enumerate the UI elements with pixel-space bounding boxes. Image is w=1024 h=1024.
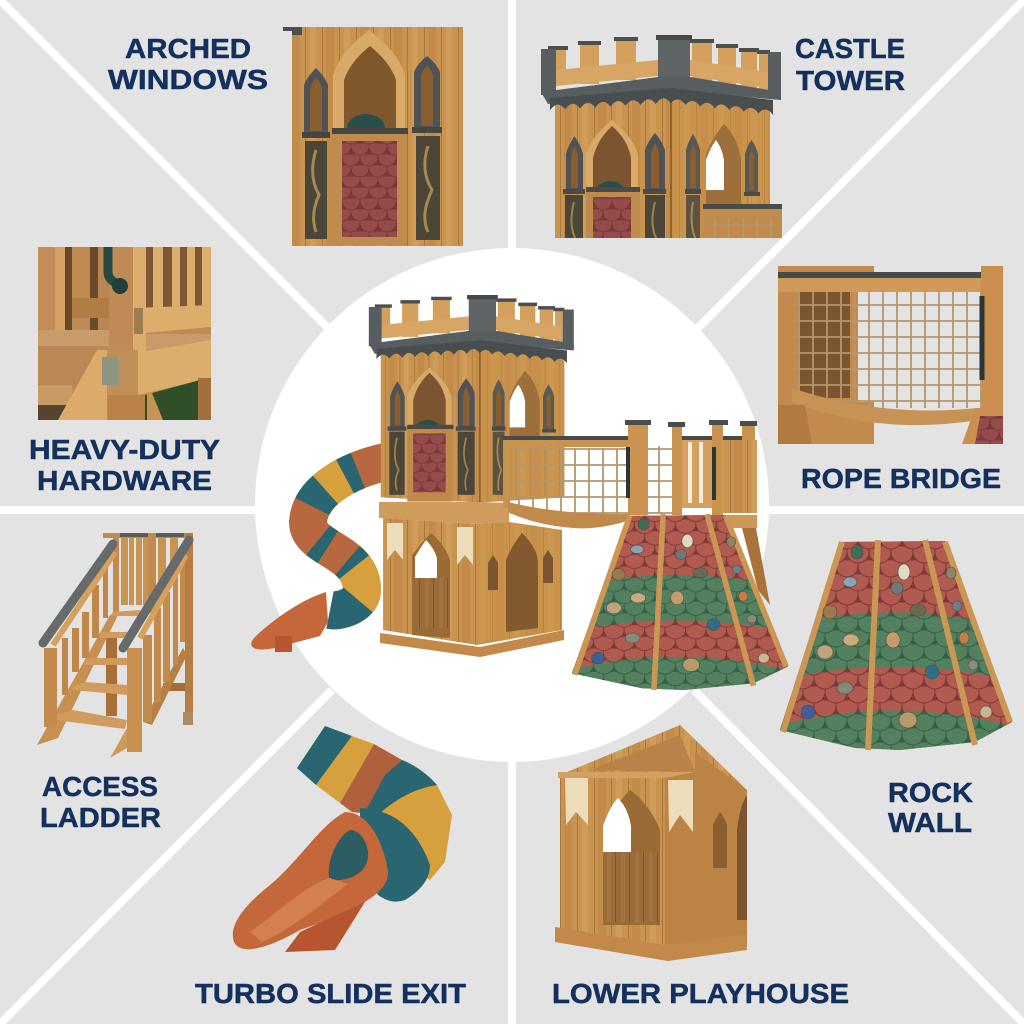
rope bridge and deck	[503, 420, 770, 605]
rear post	[106, 638, 117, 716]
heading: castle tower: TOWER	[796, 65, 905, 96]
centre white circle	[255, 248, 769, 762]
panel: turbo slide exit	[233, 726, 452, 952]
upper tower	[369, 295, 574, 503]
stringer	[37, 615, 118, 745]
doorway	[603, 790, 660, 925]
panel: castle tower	[541, 35, 905, 238]
heading: heavy-duty hardware: HARDWARE	[37, 465, 212, 496]
panel: lower playhouse	[555, 725, 747, 961]
heading: arched windows	[108, 33, 268, 95]
heading: rock wall	[888, 777, 973, 838]
grey handrail right	[123, 540, 189, 648]
heading: heavy-duty hardware: HEAVY-DUTY	[29, 434, 220, 465]
grey handrail left	[43, 544, 113, 643]
slide exit	[251, 592, 328, 652]
right balusters	[143, 558, 185, 722]
heading: rock wall: ROCK	[888, 777, 973, 808]
heading: access ladder	[40, 771, 161, 833]
heading: access ladder: ACCESS	[42, 771, 158, 802]
rock wall centre	[563, 510, 795, 698]
playhouse illustration	[555, 725, 747, 961]
heading: rock wall: WALL	[888, 807, 972, 838]
heading: arched windows: WINDOWS	[108, 64, 268, 95]
tube slide	[308, 462, 385, 610]
panel: heavy-duty hardware	[29, 247, 220, 496]
hardware photo	[38, 247, 211, 420]
slide mouth and chute	[233, 812, 388, 952]
heading: heavy-duty hardware	[29, 434, 220, 496]
banners	[565, 778, 588, 825]
slide tube bands	[297, 726, 452, 902]
side window	[713, 812, 727, 868]
central playset	[251, 295, 795, 698]
treads	[55, 610, 140, 729]
castle tower illustration	[541, 35, 782, 238]
heading: turbo slide exit: TURBO SLIDE EXIT	[195, 978, 466, 1009]
left balusters	[62, 568, 108, 695]
panel: rope bridge	[778, 266, 1003, 494]
panel: arched windows	[108, 27, 463, 246]
dragon panels	[305, 141, 327, 239]
handrail bracket	[108, 247, 118, 284]
tower face	[283, 27, 463, 246]
panel: rock wall	[770, 535, 1020, 838]
panel: access ladder	[37, 533, 193, 833]
ladder illustration	[37, 533, 193, 758]
steel plate	[102, 357, 119, 385]
heading: lower playhouse: LOWER PLAYHOUSE	[552, 978, 849, 1009]
back railing	[121, 537, 178, 605]
rope bridge photo	[778, 266, 1003, 444]
heading: castle tower: CASTLE	[795, 33, 905, 64]
heading: access ladder: LADDER	[40, 802, 161, 833]
heading: arched windows: ARCHED	[125, 33, 251, 64]
rock wall illustration	[770, 535, 1020, 760]
heading: castle tower	[795, 33, 905, 96]
upper slats	[65, 247, 98, 332]
lower tower storey	[379, 502, 564, 657]
red scale panel	[342, 141, 397, 237]
heading: rope bridge: ROPE BRIDGE	[801, 463, 1001, 494]
